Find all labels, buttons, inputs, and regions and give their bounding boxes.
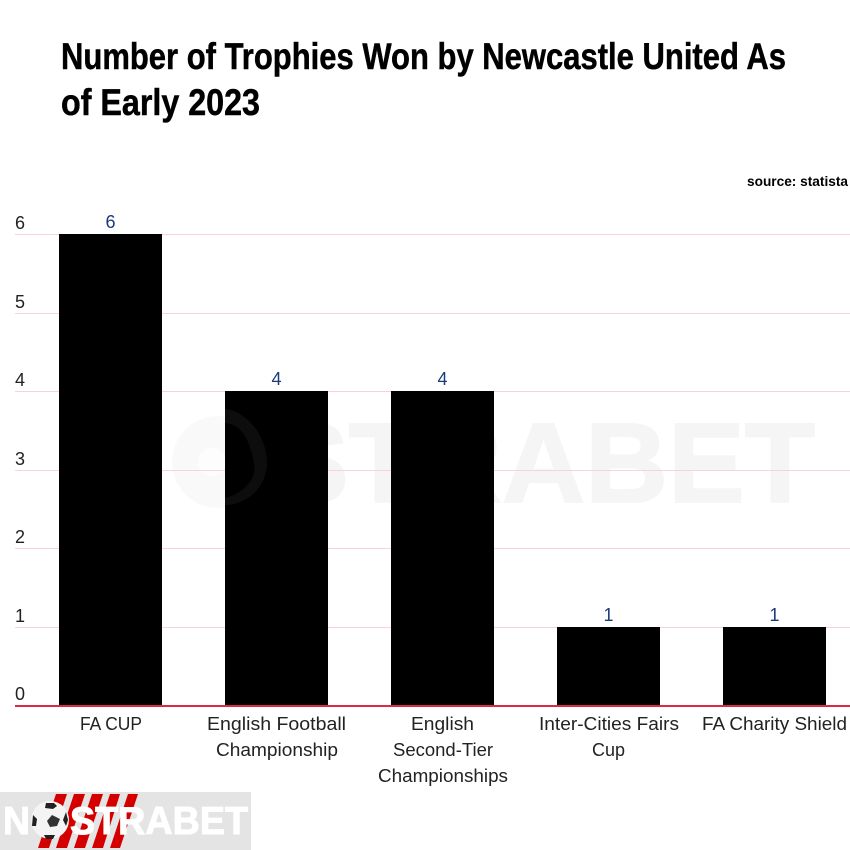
y axis labels: 4 <box>15 370 25 390</box>
y axis labels: 2 <box>15 527 25 547</box>
bar: Inter-Cities Fairs Cup: 1 <box>603 605 614 625</box>
logo wordmark: STRABET <box>70 800 248 843</box>
title <box>61 36 786 123</box>
y axis labels: 6 <box>15 213 25 233</box>
title: of Early 2023 <box>61 82 260 123</box>
x axis labels <box>80 714 847 786</box>
bar: English Football Championship: 4 <box>271 369 282 389</box>
y axis labels: 5 <box>15 292 25 312</box>
x axis labels: English <box>411 714 474 734</box>
bar: FA Charity Shield: 1 <box>769 605 780 625</box>
x axis labels: Championship <box>216 740 338 760</box>
x axis labels: FA CUP <box>80 714 142 734</box>
bar chart <box>59 212 826 706</box>
source note: source: statista <box>747 173 848 189</box>
y axis labels: 3 <box>15 449 25 469</box>
bar: Inter-Cities Fairs Cup <box>557 605 660 706</box>
bar: FA CUP: 6 <box>105 212 116 232</box>
x axis baseline <box>15 705 850 707</box>
y axis labels: 1 <box>15 606 25 626</box>
logo: Nostrabet <box>0 792 251 850</box>
x axis labels: Championships <box>378 766 508 786</box>
bar: English Second-Tier Championships: 4 <box>437 369 448 389</box>
bar: English Second-Tier Championships <box>391 369 494 706</box>
grid lines <box>15 234 850 628</box>
x axis labels: Inter-Cities Fairs <box>539 714 679 734</box>
bar: FA Charity Shield <box>723 605 826 706</box>
bar: English Football Championship <box>225 369 328 706</box>
x axis labels: FA Charity Shield <box>702 714 847 734</box>
x axis labels: Second-Tier <box>393 740 493 760</box>
logo football icon <box>31 801 69 839</box>
x axis labels: English Football <box>207 714 346 734</box>
logo wordmark: N <box>3 800 30 843</box>
y axis labels: 0 <box>15 684 25 704</box>
x axis labels: Cup <box>592 740 625 760</box>
y axis labels <box>15 213 25 704</box>
logo stripes <box>38 794 138 848</box>
bar: FA CUP <box>59 212 162 706</box>
watermark: Nostrabet: STRABET <box>272 400 815 526</box>
